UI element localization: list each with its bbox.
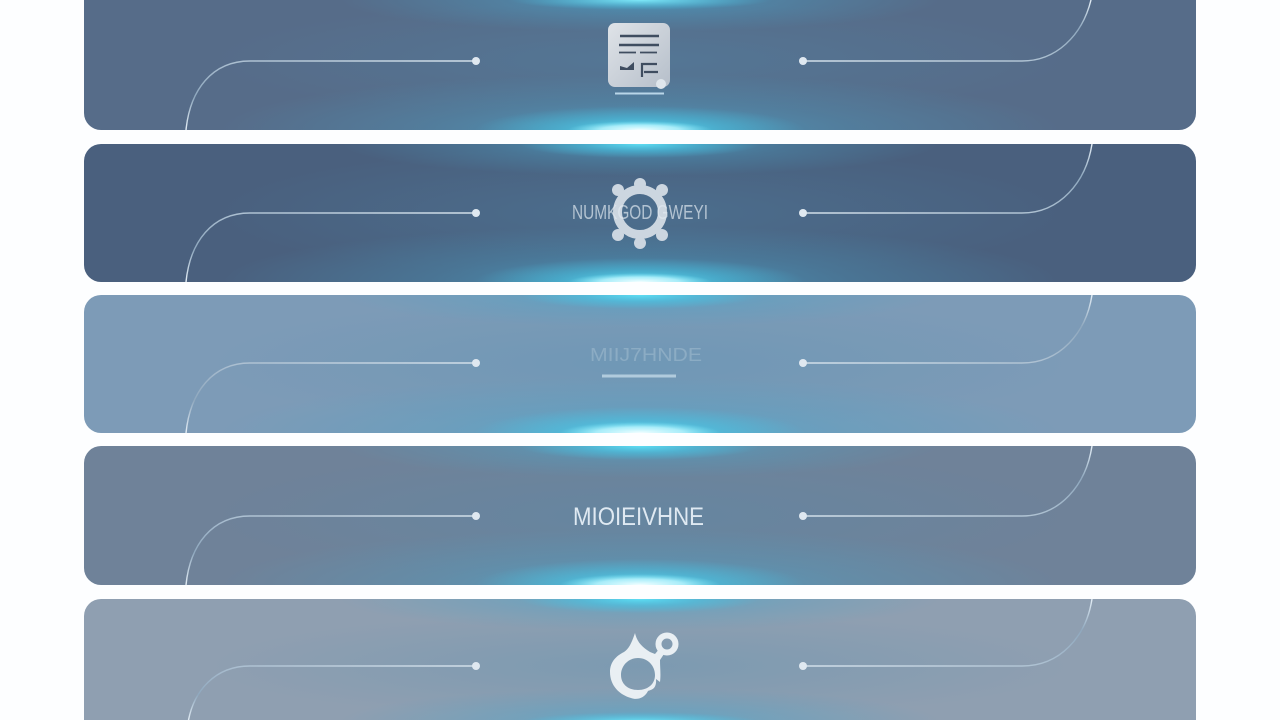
left connector line: [186, 512, 480, 585]
icon: clasp hook: [610, 633, 676, 699]
right connector line: [799, 295, 1092, 367]
panel 5: hook: [84, 599, 1196, 720]
panel 1: document: [84, 0, 1196, 130]
icon: document checklist: [608, 23, 670, 94]
right connector line: [799, 144, 1092, 217]
right connector line: [799, 0, 1091, 65]
faint label with underline: MIIJ7HNDE: [590, 345, 702, 365]
garbled label: MIOIEIVHNE: [573, 503, 704, 531]
left connector line: [186, 209, 480, 282]
panel 2: gear: [84, 144, 1196, 282]
left connector line: [188, 662, 480, 720]
right connector line: [799, 599, 1092, 670]
left connector line: [186, 57, 480, 130]
panel 4: text label: [84, 446, 1196, 585]
left connector line: [186, 359, 480, 433]
panel 3: faint label: [84, 295, 1196, 433]
faint label with underline: [590, 345, 702, 376]
icon: gear: [612, 178, 668, 249]
right connector line: [799, 446, 1092, 520]
garbled label: NUMKGOD GWEYI: [572, 202, 708, 224]
